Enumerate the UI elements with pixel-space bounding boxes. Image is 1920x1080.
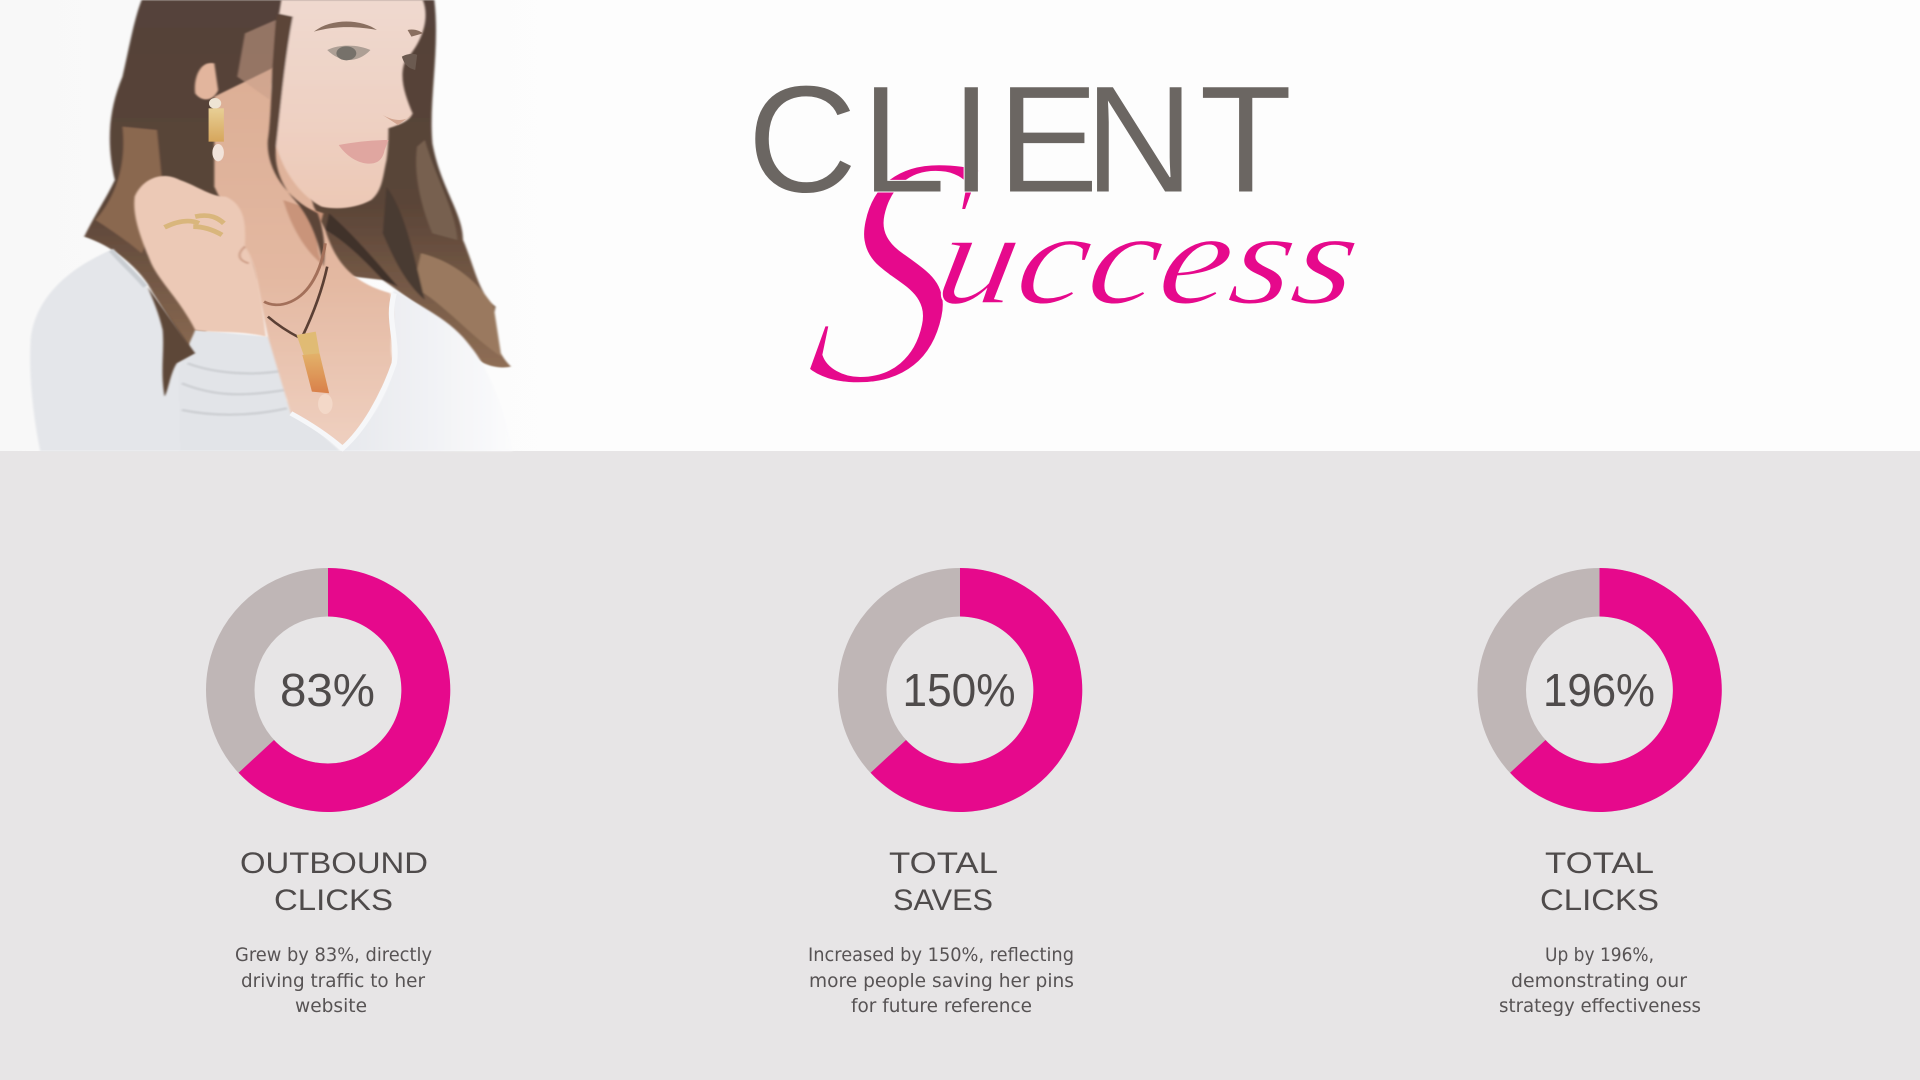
photo: hand with rings [134, 176, 266, 337]
donut chart: 83%: 83% [280, 664, 375, 716]
title: CLIENT: CLIENT [747, 54, 1292, 225]
heading: outbound clicks: OUTBOUND [240, 847, 428, 880]
photo: neck and chest [214, 67, 394, 448]
description: total clicks [1499, 944, 1701, 1017]
heading: total saves [889, 847, 998, 917]
description: outbound clicks: website [295, 995, 367, 1017]
donut chart: 196% [1502, 568, 1722, 812]
photo: eye, brow, nose and lips [314, 21, 423, 164]
description: outbound clicks [235, 944, 432, 1017]
title: script word Success [784, 85, 1371, 456]
column: total saves [808, 568, 1082, 1017]
heading: outbound clicks [240, 847, 428, 917]
photo: gold rings [165, 216, 224, 235]
heading: outbound clicks: CLICKS [274, 884, 393, 917]
description: total saves: more people saving her pins [809, 970, 1074, 992]
panel: statistics background [0, 451, 1920, 1080]
heading: total clicks: CLICKS [1540, 884, 1659, 917]
photo: earring [209, 98, 224, 161]
photo: woman in profile with jewellery [0, 0, 566, 451]
heading: total clicks [1540, 847, 1659, 917]
heading: total saves: SAVES [893, 884, 993, 917]
heading: total clicks: TOTAL [1545, 847, 1654, 880]
heading: total saves: TOTAL [889, 847, 998, 880]
donut chart: 83% [230, 568, 450, 812]
photo: neckline ruffle [291, 293, 395, 448]
title: script word Success: S [784, 85, 1006, 456]
donut chart: 196%: 196% [1543, 664, 1655, 716]
photo: back hair [84, 0, 511, 367]
panel: header background [0, 0, 1920, 451]
description: outbound clicks: Grew by 83%, directly [235, 944, 432, 966]
photo: lower hair strand over shirt [147, 287, 195, 397]
description: total saves: for future reference [851, 995, 1032, 1017]
description: total clicks: Up by 196%, [1545, 944, 1654, 966]
title: script word Success: uccess [927, 185, 1371, 332]
description: outbound clicks: driving traffic to her [241, 970, 425, 992]
donut chart: 150%: 150% [902, 664, 1016, 716]
column: outbound clicks [230, 568, 450, 1017]
description: total clicks: strategy effectiveness [1499, 995, 1701, 1017]
description: total saves: Increased by 150%, reflecting [808, 944, 1074, 966]
photo: face [195, 0, 426, 267]
photo: necklaces and pendant [264, 243, 333, 414]
donut chart: 150% [862, 568, 1082, 812]
description: total saves [808, 944, 1074, 1017]
photo: shirt [30, 250, 513, 451]
description: total clicks: demonstrating our [1511, 970, 1687, 992]
column: total clicks [1499, 568, 1722, 1017]
